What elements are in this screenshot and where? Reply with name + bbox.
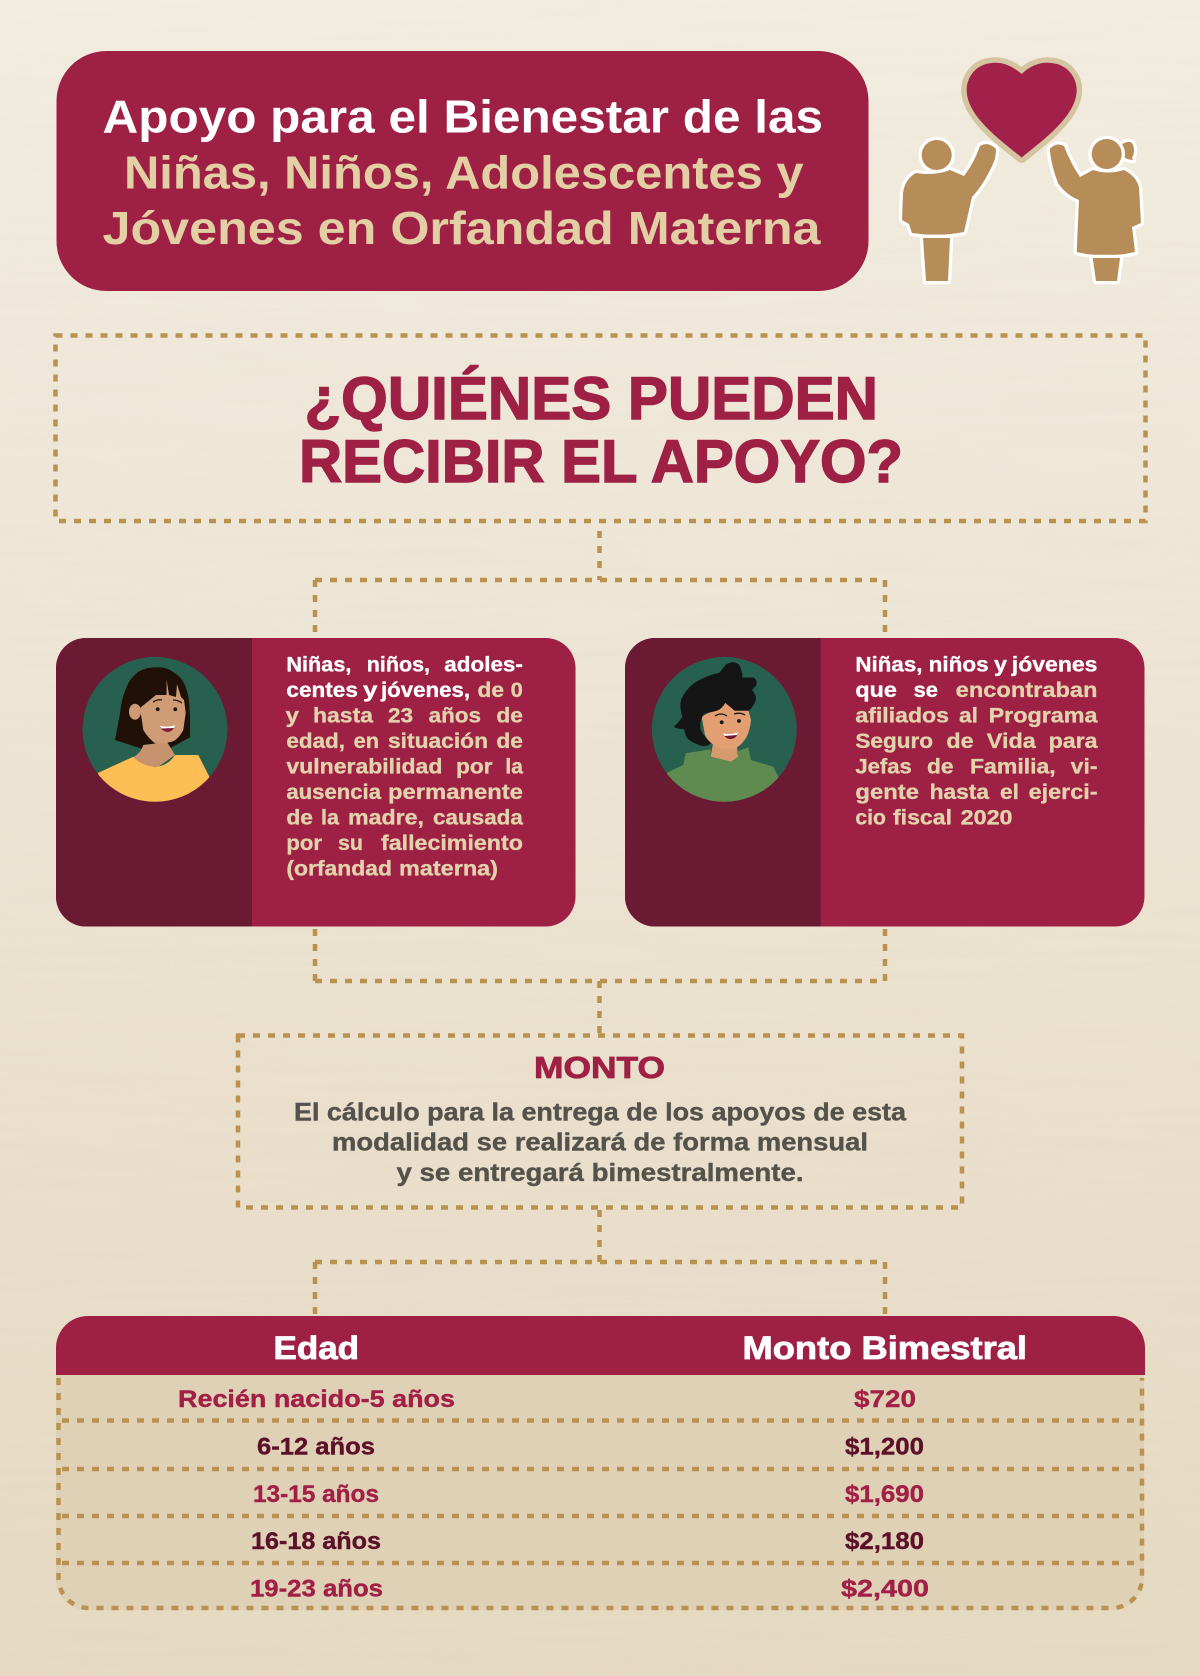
portrait: girl bbox=[82, 657, 228, 810]
panel: orphaned children card: de bbox=[286, 806, 313, 830]
row: 13-15 bbox=[253, 1481, 924, 1508]
panel: orphaned children card: por bbox=[286, 832, 322, 855]
panel: insured program card: de bbox=[946, 730, 974, 753]
panel: insured program card: fiscal bbox=[893, 806, 952, 830]
panel: insured program card: hasta bbox=[930, 781, 989, 804]
panel: insured program card: al bbox=[959, 704, 978, 728]
icon: right child bbox=[1050, 139, 1141, 281]
panel: insured program card: encontraban bbox=[956, 679, 1098, 702]
row: 6-12 bbox=[257, 1434, 924, 1460]
row: 19-23: 19-23 años bbox=[250, 1576, 383, 1602]
card text: Niñas, bbox=[286, 654, 351, 676]
panel: orphaned children card: situación bbox=[388, 730, 488, 753]
panel: orphaned children card: materna) bbox=[399, 858, 498, 880]
panel: insured program card: 2020 bbox=[961, 806, 1012, 830]
panel: orphaned children card: causada bbox=[433, 806, 523, 830]
row: 13-15: $1,690 bbox=[845, 1481, 924, 1508]
icon: heart bbox=[967, 63, 1077, 157]
panel: insured program card: Familia, bbox=[970, 756, 1056, 778]
card text: Niñas, bbox=[855, 654, 922, 676]
panel: insured program card: ejerci- bbox=[1029, 781, 1098, 804]
row: 16-18: 16-18 años bbox=[251, 1528, 381, 1555]
amount heading: MONTO bbox=[534, 1050, 665, 1085]
panel: insured program card: para bbox=[1049, 730, 1098, 753]
panel: insured program card: que bbox=[855, 679, 897, 702]
heading: ¿QUIÉNES PUEDEN bbox=[304, 365, 878, 432]
panel: insured program card: cio bbox=[855, 806, 886, 830]
row: 19-23 bbox=[250, 1576, 929, 1602]
title line 3: Jóvenes en Orfandad Materna bbox=[102, 202, 821, 254]
card text: niños bbox=[929, 654, 989, 676]
panel: orphaned children card: (orfandad bbox=[286, 858, 392, 880]
row: 6-12: 6-12 años bbox=[257, 1434, 375, 1460]
icon: two children holding a heart bbox=[902, 63, 1141, 281]
panel: insured program card: Programa bbox=[989, 704, 1098, 728]
connector: cards to amount bbox=[315, 929, 885, 1033]
panel: orphaned children card: edad, bbox=[286, 730, 345, 753]
portrait: boy bbox=[652, 657, 797, 810]
table header bbox=[56, 1316, 1145, 1375]
panel: orphaned children card: hasta bbox=[313, 704, 373, 728]
connector: question to cards bbox=[315, 531, 885, 636]
card text: y bbox=[994, 654, 1007, 676]
panel: orphaned children card: la bbox=[321, 806, 339, 830]
panel: insured program card: se bbox=[914, 679, 938, 702]
title banner bbox=[56, 51, 868, 291]
panel: orphaned children card: la bbox=[505, 756, 523, 778]
card text: niños, bbox=[367, 654, 430, 676]
panel: orphaned children card: de bbox=[496, 704, 523, 728]
icon: left child bbox=[902, 140, 996, 281]
card text: jóvenes bbox=[1011, 654, 1098, 676]
panel: orphaned children card: 23 bbox=[388, 704, 413, 728]
table: bimonthly amounts bbox=[56, 1316, 1145, 1610]
title line 1: Apoyo para el Bienestar de las bbox=[102, 90, 823, 142]
question box: RECIBIR EL APOYO? bbox=[299, 428, 903, 495]
panel: orphaned children card: y bbox=[286, 704, 299, 728]
connector: amount to table bbox=[315, 1210, 885, 1314]
panel: orphaned children card: permanente bbox=[388, 781, 523, 804]
panel: orphaned children card: jóvenes, bbox=[380, 679, 470, 702]
title line 2: Niñas, Niños, Adolescentes y bbox=[124, 146, 804, 198]
card text: adoles- bbox=[444, 654, 523, 676]
amount description: y se entregará bimestralmente. bbox=[396, 1159, 804, 1187]
table header: Monto Bimestral bbox=[742, 1330, 1027, 1366]
table body bbox=[56, 1374, 1144, 1610]
panel: insured program card: el bbox=[1000, 781, 1019, 804]
amount description bbox=[294, 1098, 907, 1187]
question box bbox=[56, 336, 1146, 521]
panel: orphaned children card: fallecimiento bbox=[381, 832, 523, 855]
row: newborn to 5: Recién nacido-5 años bbox=[178, 1386, 455, 1413]
panel: insured program card: Jefas bbox=[855, 756, 912, 778]
row: newborn to 5 bbox=[178, 1386, 916, 1413]
panel: insured program card: vi- bbox=[1071, 756, 1098, 778]
row: 13-15: 13-15 años bbox=[253, 1481, 379, 1508]
table header: Edad bbox=[274, 1330, 359, 1366]
panel: orphaned children card: vulnerabilidad bbox=[286, 756, 442, 778]
panel: insured program card: gente bbox=[855, 781, 919, 804]
panel: orphaned children card: en bbox=[354, 730, 379, 753]
amount description: modalidad se realizará de forma mensual bbox=[332, 1128, 868, 1156]
panel: insured program card: de bbox=[927, 756, 954, 778]
row: 19-23: $2,400 bbox=[841, 1576, 929, 1602]
panel: orphaned children card: años bbox=[429, 704, 481, 728]
panel: orphaned children card: de bbox=[478, 679, 504, 702]
panel: orphaned children card: madre, bbox=[348, 806, 424, 830]
panel: orphaned children card: de bbox=[496, 730, 523, 753]
panel: orphaned children card: por bbox=[456, 756, 492, 778]
panel: orphaned children card: su bbox=[338, 832, 363, 855]
panel: insured program card bbox=[625, 638, 1144, 926]
panel: insured program card: afiliados bbox=[855, 704, 949, 728]
panel: orphaned children card: ausencia bbox=[286, 781, 381, 804]
row: 16-18: $2,180 bbox=[845, 1528, 924, 1555]
amount box bbox=[238, 1036, 962, 1208]
panel: orphaned children card: 0 bbox=[511, 679, 523, 702]
amount description: El cálculo para la entrega de los apoyos de esta bbox=[294, 1098, 907, 1126]
panel: orphaned children card: centes bbox=[286, 679, 358, 702]
panel: insured program card: Vida bbox=[987, 730, 1036, 753]
panel: orphaned children card bbox=[56, 638, 576, 926]
row: newborn to 5: $720 bbox=[854, 1386, 916, 1413]
panel: orphaned children card: y bbox=[363, 679, 378, 702]
row: 16-18 bbox=[251, 1528, 924, 1555]
panel: insured program card: Seguro bbox=[855, 730, 933, 753]
row: 6-12: $1,200 bbox=[845, 1434, 924, 1460]
